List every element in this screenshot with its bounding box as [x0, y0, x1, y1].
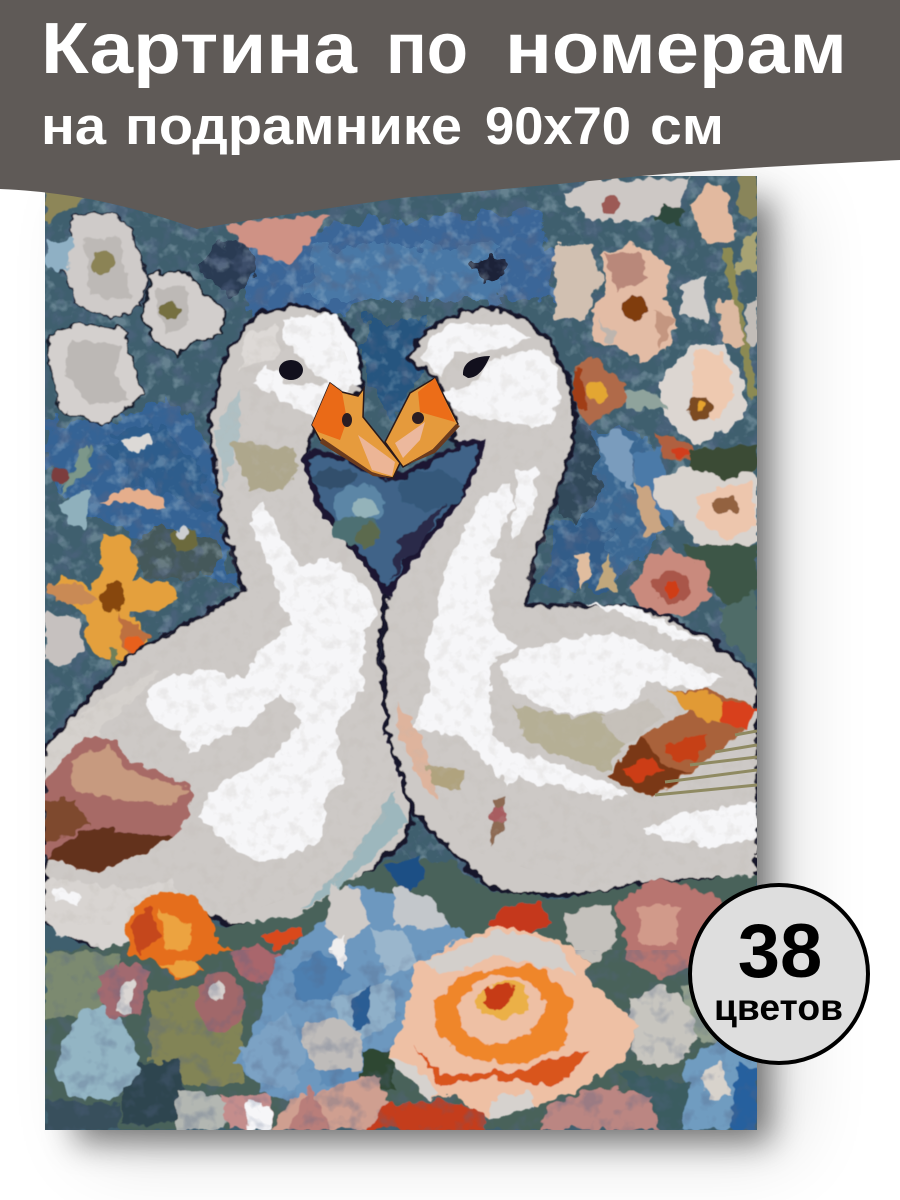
large peach rose — [388, 925, 637, 1118]
heading: title: номерам — [505, 9, 847, 89]
badge: 38 colours: цветов — [714, 987, 843, 1028]
left goose wing feathers — [45, 737, 192, 873]
background colour patches — [45, 210, 670, 590]
eye: right goose — [463, 356, 490, 378]
right goose wing feathers — [607, 690, 757, 797]
flowers upper left — [45, 180, 330, 552]
eye: left goose — [279, 360, 303, 380]
right goose — [382, 308, 757, 895]
bouquet mottling — [45, 950, 757, 1130]
painting background — [45, 176, 757, 1130]
badge: 38 colours: 38 — [738, 909, 822, 994]
heading: title: по — [386, 9, 468, 89]
badge: 38 colours — [690, 885, 868, 1063]
beak: left goose — [312, 383, 400, 478]
heading: subtitle: см — [650, 97, 724, 156]
heading: subtitle: на — [41, 97, 107, 156]
heading: subtitle: подрамнике — [125, 97, 462, 156]
heading: title: Картина — [41, 9, 358, 89]
orange flower left — [45, 533, 178, 668]
left goose — [45, 306, 412, 950]
heading: subtitle — [41, 97, 724, 156]
left goose gray mottling — [45, 320, 380, 924]
heart-shaped gap between necks — [305, 441, 480, 592]
tail stripes — [655, 731, 757, 795]
heading: title — [41, 9, 847, 89]
canvas drop shadow — [75, 200, 790, 1150]
right goose gray mottling — [385, 308, 757, 898]
header banner — [0, 0, 900, 229]
flower bouquet at bottom — [45, 855, 757, 1130]
flowers upper right — [555, 176, 757, 665]
orange flower bottom left — [125, 892, 233, 980]
heading: subtitle: 90х70 — [485, 97, 631, 156]
background mottling — [45, 176, 757, 916]
beak: right goose — [385, 378, 460, 467]
painting: two white geese with flowers — [45, 176, 757, 1130]
